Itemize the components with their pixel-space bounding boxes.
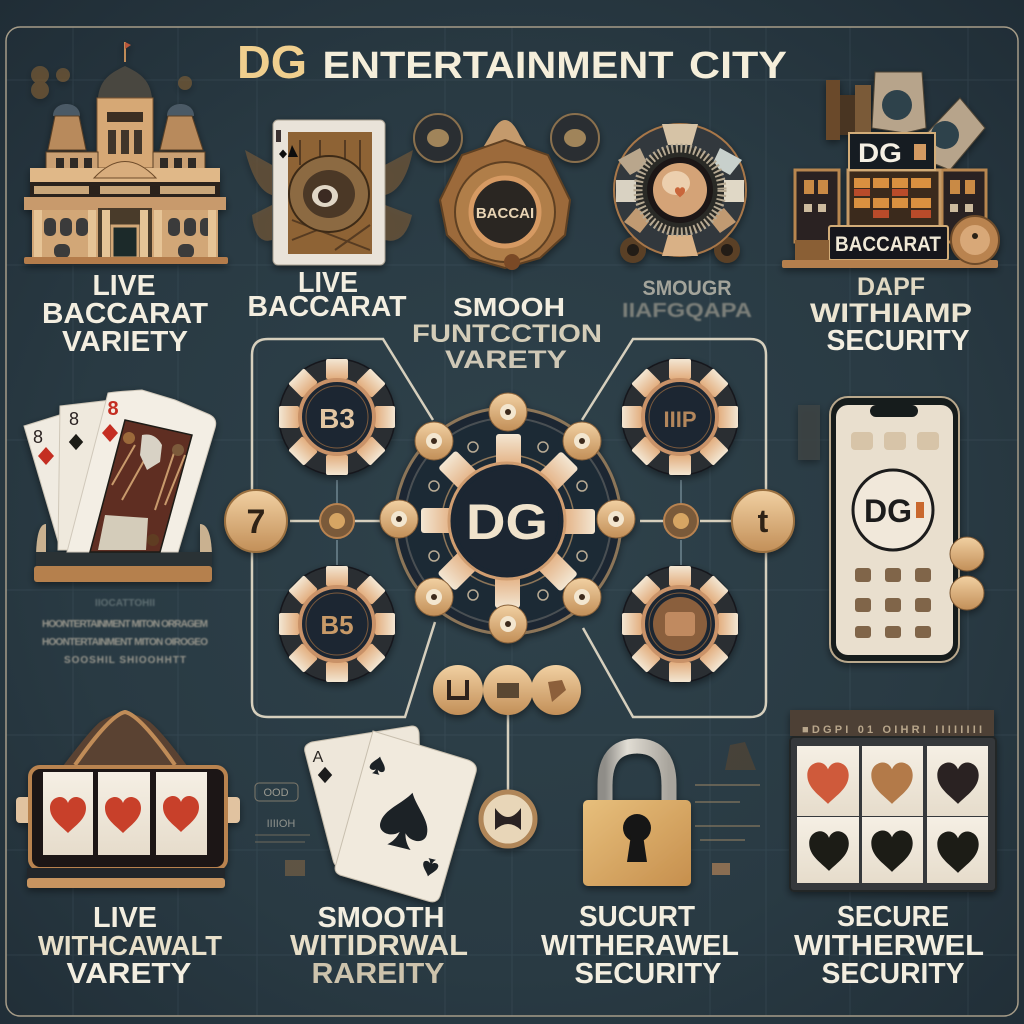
icon: token below connector [481, 792, 535, 846]
label: smooth function variety: VARETY [445, 346, 567, 374]
icon: playing card fan [24, 390, 216, 582]
title: ENTERTAINMENT [322, 45, 674, 87]
tiny illegible caption [42, 598, 208, 666]
small faint tags: IIIIOH [267, 818, 295, 830]
icon: top chip [614, 124, 746, 263]
icon: chip top right: IIIP [663, 407, 697, 432]
title [237, 36, 787, 88]
icon: slot machine hearts [16, 712, 240, 888]
label: live baccarat: BACCARAT [248, 291, 407, 323]
label: dapp withdrawal security: SECURITY [826, 325, 970, 357]
right small node [664, 504, 698, 538]
icon: chip top left [279, 359, 395, 475]
icon: baccarat medallion: BACCAI [476, 205, 534, 222]
label: dapp withdrawal security [810, 273, 972, 357]
label: sucurt withdrawal security: SUCURT [579, 901, 695, 933]
label: live baccarat [248, 267, 407, 323]
icon: baccarat machine [782, 72, 999, 268]
small faint tags: OOD [263, 787, 289, 799]
icon: palace [24, 42, 228, 264]
label: sucurt withdrawal security: SECURITY [574, 958, 722, 990]
tiny illegible caption: HOONTERTAINMENT MITON ORRAGEM [42, 619, 208, 630]
label: secure withdrawal security: WITHERWEL [794, 930, 984, 962]
label: sucurt withdrawal security [541, 901, 739, 990]
icon: smartphone [798, 397, 984, 662]
title: DG [237, 36, 307, 88]
icon: baccarat medallion [414, 114, 599, 270]
label: smooth function variety: FUNTCCTION [412, 320, 602, 348]
label: live baccarat variety: VARIETY [62, 326, 188, 358]
left small node [320, 504, 354, 538]
label: smooth withdrawal rarity: WITIDRWAL [290, 930, 468, 962]
icon: padlock [583, 746, 691, 886]
icon: chip top left: B3 [319, 403, 355, 434]
label: live baccarat variety [42, 270, 208, 358]
label: smooth payout faded [622, 277, 752, 322]
label: smooth withdrawal rarity [290, 902, 468, 990]
connector frame [252, 339, 766, 795]
central DG wheel: DG [466, 494, 548, 550]
icon: playing card fan: 8 [69, 409, 79, 429]
icon: chip bottom left [279, 566, 395, 682]
icon: spade cards [305, 726, 476, 902]
label: secure withdrawal security: SECURE [837, 901, 949, 933]
label: smooth payout faded: IIAFGQAPA [622, 300, 752, 322]
icon: suit grid: ■DGPI 01 OIHRI IIIIIIII [802, 724, 982, 736]
label: live baccarat variety: BACCARAT [42, 298, 208, 330]
label: sucurt withdrawal security: WITHERAWEL [541, 930, 739, 962]
decorative security sketches [695, 742, 760, 875]
icon: baccarat card [245, 120, 413, 265]
label: smooth withdrawal rarity: RAREITY [312, 958, 444, 990]
icon: chip top right [622, 359, 738, 475]
tiny illegible caption: HOONTERTAINMENT MITON OIROGEO [42, 637, 208, 648]
label: live withdrawal variety [38, 902, 222, 990]
label: secure withdrawal security: SECURITY [822, 958, 964, 990]
tiny illegible caption: SOOSHIL SHIOOHHTT [64, 655, 186, 666]
label: dapp withdrawal security: WITHIAMP [810, 298, 972, 328]
label: smooth withdrawal rarity: SMOOTH [318, 902, 444, 934]
icon: smartphone: DG [864, 493, 912, 529]
label: secure withdrawal security [794, 901, 984, 990]
icon: playing card fan: 8 [107, 398, 119, 420]
left connector node: 7 [247, 503, 265, 541]
icon: chip bottom right [622, 566, 738, 682]
icon: three small tokens [433, 665, 581, 715]
label: live baccarat: LIVE [298, 267, 358, 299]
tiny illegible caption: IIOCATTOHII [95, 598, 155, 609]
icon: suit grid [790, 710, 996, 891]
title: CITY [689, 45, 787, 87]
label: dapp withdrawal security: DAPF [857, 273, 925, 301]
label: smooth function variety: SMOOH [453, 292, 565, 322]
right connector node: t [758, 503, 769, 539]
small faint tags [255, 783, 310, 876]
right connector node [732, 490, 794, 552]
label: smooth function variety [412, 292, 602, 374]
label: smooth payout faded: SMOUGR [642, 277, 732, 300]
central DG wheel [380, 393, 635, 643]
label: live withdrawal variety: LIVE [93, 902, 157, 934]
label: live withdrawal variety: VARETY [66, 958, 192, 990]
icon: spade cards: A [313, 749, 324, 766]
left connector node [225, 490, 287, 552]
icon: baccarat machine: DG [858, 138, 902, 168]
label: live withdrawal variety: WITHCAWALT [38, 930, 222, 961]
label: live baccarat variety: LIVE [92, 270, 156, 302]
icon: chip bottom left: B5 [320, 610, 354, 640]
icon: baccarat machine: BACCARAT [835, 233, 941, 256]
icon: playing card fan: 8 [33, 427, 43, 447]
